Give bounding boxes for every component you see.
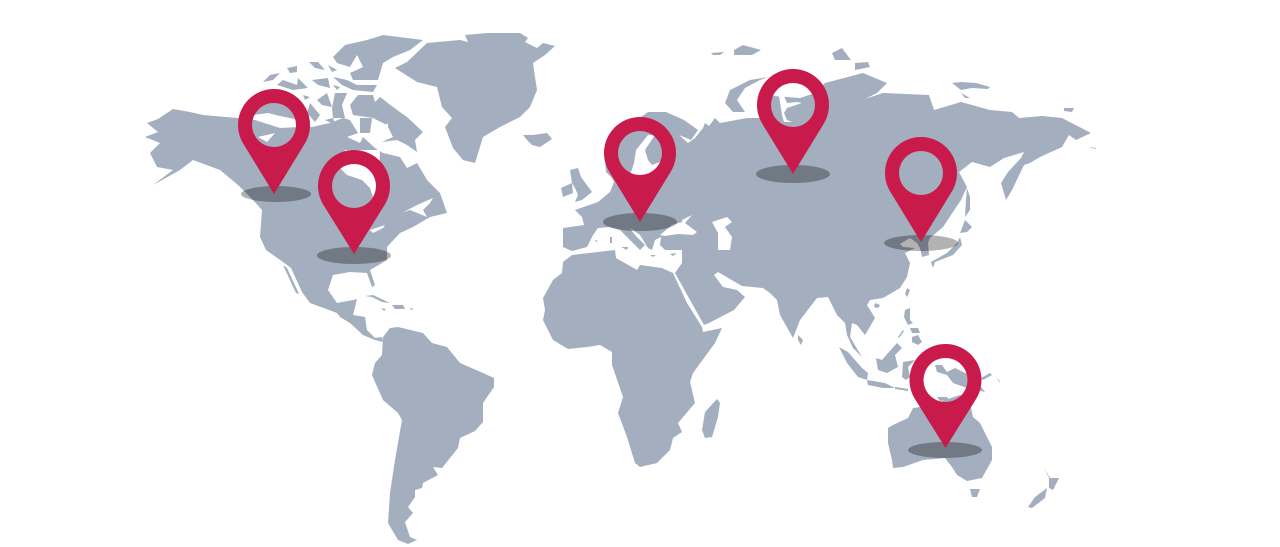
world map — [145, 33, 1096, 544]
water: Baltic Sea — [630, 135, 662, 175]
landmass: Novaya Zemlya — [725, 77, 768, 112]
pin shadows — [241, 165, 982, 458]
landmass: Iceland — [523, 133, 552, 147]
water: Caspian Sea — [712, 217, 732, 250]
landmass: South America — [372, 327, 494, 544]
landmass: Caribbean islands — [365, 295, 414, 311]
landmass: New Zealand — [1028, 468, 1059, 508]
water: Hudson Bay — [340, 150, 380, 197]
landmass: Tasmania — [970, 489, 980, 497]
pin: Europe — [604, 117, 676, 222]
landmass: Victoria Island — [253, 103, 310, 120]
pin: China — [885, 137, 957, 242]
location pins — [238, 69, 982, 448]
landmass: Sakhalin — [965, 188, 970, 217]
landmass: Japan — [931, 220, 972, 268]
landmass: Australia — [888, 395, 992, 481]
landmass: Arctic Russian islands — [711, 45, 1096, 149]
landmass: Eurasia — [563, 73, 1091, 357]
water: Great Lakes and Gulf of St Lawrence — [370, 123, 433, 233]
landmass: Ellesmere and Devon Islands — [333, 35, 423, 80]
landmass: Arctic archipelago — [263, 62, 377, 133]
landmass: Baffin Island — [350, 95, 423, 152]
landmass: United Kingdom and Ireland — [561, 168, 592, 202]
water: Gulf of Ob — [779, 96, 802, 122]
water: Arctic channel and Great Bear Lake — [258, 133, 275, 142]
pin: Russia — [757, 69, 829, 174]
landmass: Greenland — [395, 33, 555, 163]
landmass: North America — [145, 109, 447, 342]
water: Black Sea — [660, 215, 697, 236]
landmass: Madagascar — [702, 399, 720, 438]
landmass: Southeast Asian islands — [798, 288, 922, 391]
pin: Canada — [238, 89, 310, 194]
landmass: Africa — [543, 250, 722, 467]
pin: United States — [318, 150, 390, 254]
landmass: Baja California — [283, 265, 299, 294]
landmass: New Guinea — [935, 365, 985, 392]
landmass: Melanesian islands — [937, 373, 1000, 401]
landmass: Mediterranean islands — [595, 237, 677, 257]
pin: Australia — [910, 344, 982, 448]
